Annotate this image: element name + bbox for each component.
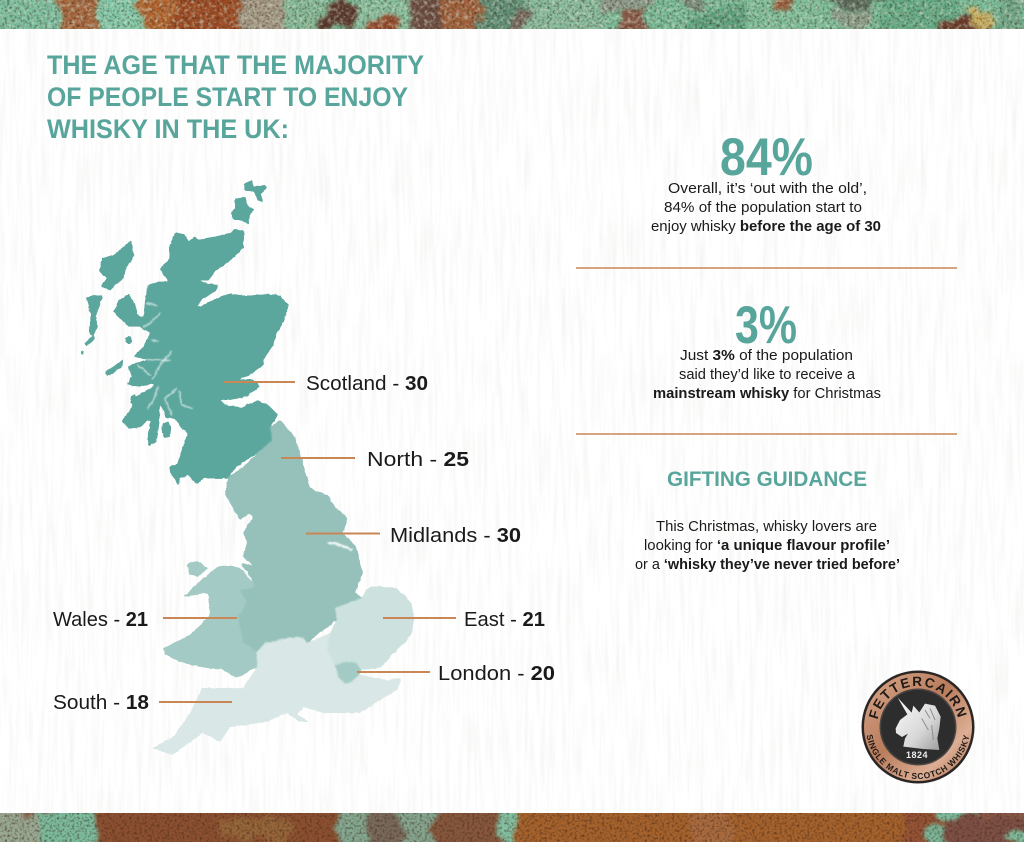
map labels: London - 20 bbox=[438, 662, 555, 685]
panel: 3% statistic: Just 3% of the population bbox=[680, 347, 853, 364]
map labels: North - 25 bbox=[367, 448, 469, 471]
region: East bbox=[327, 586, 414, 670]
map labels: South - 18 bbox=[53, 691, 149, 714]
panel: gifting guidance: This Christmas, whisky lovers are bbox=[656, 518, 877, 535]
panel: 3% statistic: 3% bbox=[735, 296, 797, 355]
title: THE AGE THAT THE MAJORITY bbox=[47, 50, 424, 80]
map labels bbox=[53, 372, 555, 714]
region: South bbox=[152, 633, 402, 755]
panel: 3% statistic bbox=[653, 296, 881, 402]
Humber estuary bbox=[328, 543, 352, 550]
region: Scotland bbox=[81, 180, 288, 487]
panel: gifting guidance: looking for ‘a unique flavour profile’ bbox=[644, 537, 890, 554]
title: WHISKY IN THE UK: bbox=[47, 114, 289, 144]
panel: gifting guidance: or a ‘whisky they’ve never tried before’ bbox=[635, 556, 900, 573]
panel: 84% statistic: Overall, it’s ‘out with the old’, bbox=[668, 180, 867, 197]
panel: 3% statistic: mainstream whisky for Christmas bbox=[653, 385, 881, 402]
map of the UK bbox=[81, 180, 414, 755]
title bbox=[47, 50, 424, 144]
logo: Fettercairn badge: 1824 bbox=[906, 750, 928, 760]
panel: gifting guidance bbox=[635, 468, 900, 573]
divider bbox=[576, 433, 957, 435]
logo: Fettercairn badge bbox=[862, 670, 974, 784]
icon: unicorn head bbox=[896, 698, 941, 750]
region: Wales bbox=[163, 561, 257, 678]
map labels: Wales - 21 bbox=[53, 608, 148, 631]
panel: 84% statistic: 84% of the population start to bbox=[664, 199, 862, 216]
panel: 84% statistic: 84% bbox=[720, 128, 813, 187]
map labels: East - 21 bbox=[464, 608, 545, 631]
divider bbox=[576, 267, 957, 269]
bottom patina strip bbox=[0, 813, 1024, 842]
map labels: Scotland - 30 bbox=[306, 372, 428, 395]
panel: 84% statistic: enjoy whisky before the age of 30 bbox=[651, 218, 881, 235]
top patina strip bbox=[0, 0, 1024, 29]
logo: Fettercairn badge: FETTERCAIRN bbox=[868, 676, 967, 719]
panel: gifting guidance: GIFTING GUIDANCE bbox=[667, 468, 867, 491]
logo: Fettercairn badge: SINGLE MALT SCOTCH WHISKY bbox=[866, 734, 969, 779]
region: North and Midlands bbox=[225, 420, 363, 652]
callout lines bbox=[159, 382, 456, 702]
panel: 3% statistic: said they’d like to receive a bbox=[679, 366, 856, 383]
map labels: Midlands - 30 bbox=[390, 524, 521, 547]
panel: 84% statistic bbox=[651, 128, 881, 235]
sea lochs bbox=[137, 303, 192, 415]
title: OF PEOPLE START TO ENJOY bbox=[47, 82, 408, 112]
region: London bbox=[335, 662, 362, 683]
